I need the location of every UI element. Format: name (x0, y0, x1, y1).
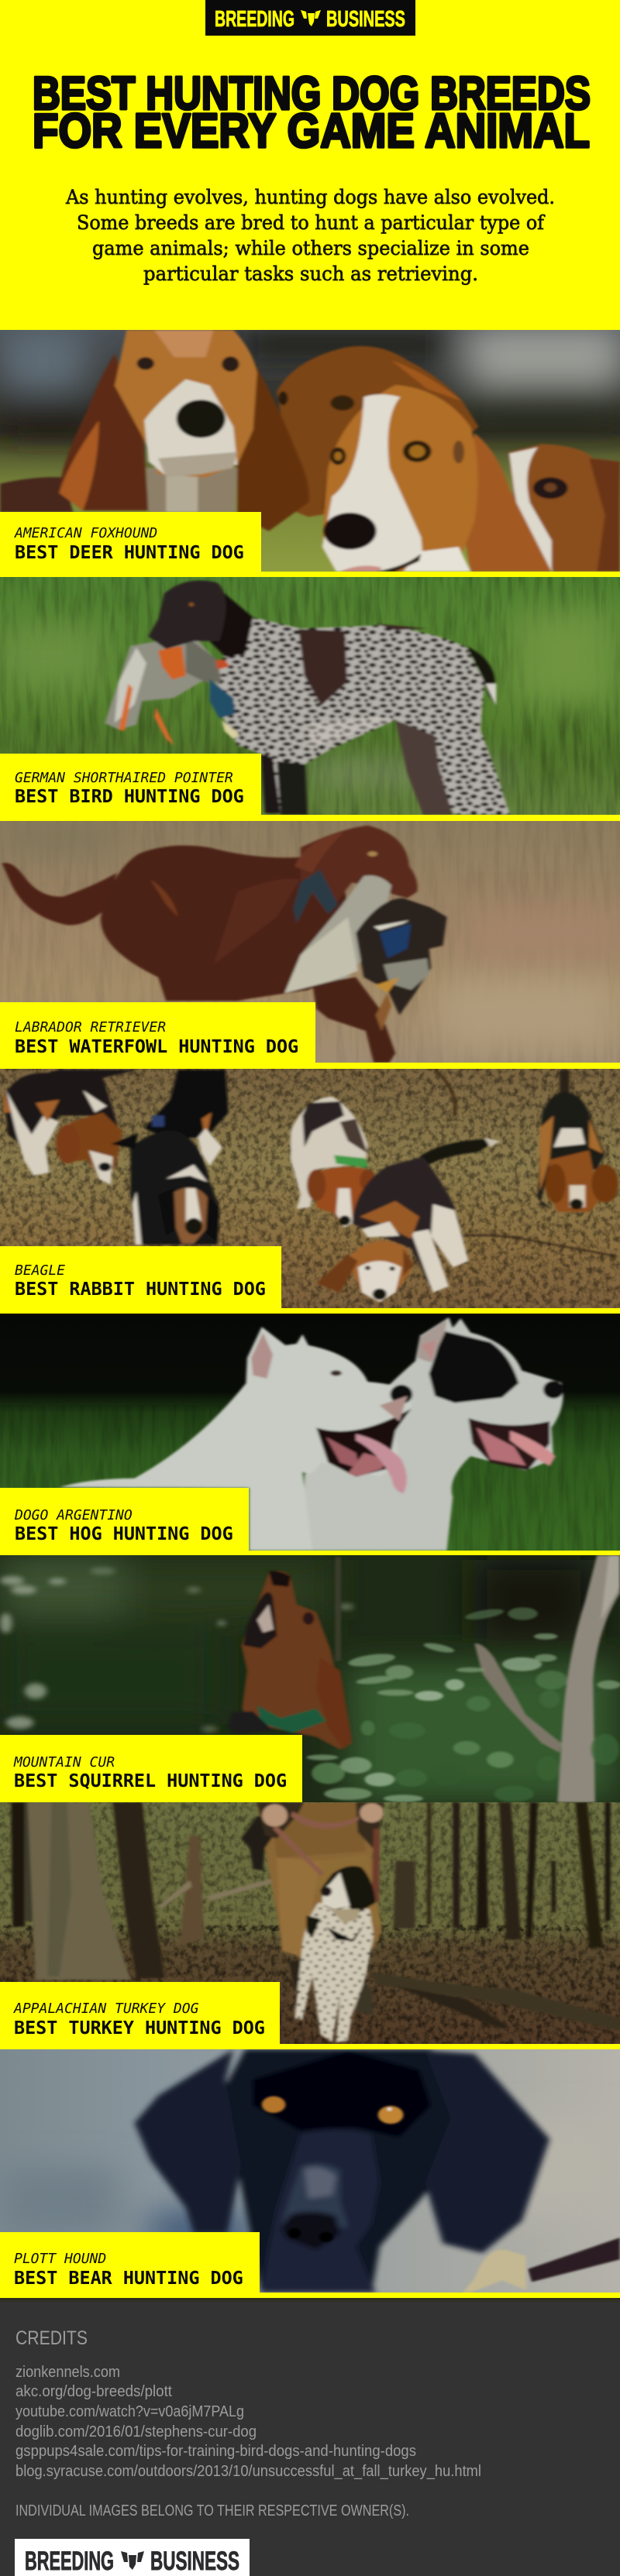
label: German Shorthaired Pointer (0, 754, 261, 821)
label: German Shorthaired Pointer: BEST BIRD HUNTING DOG (15, 785, 244, 807)
collar and leash (528, 2238, 620, 2282)
tree trunks (11, 1802, 25, 1927)
dog (294, 1903, 374, 2042)
panel: Dogo Argentino photo (0, 1314, 620, 1551)
duck (284, 875, 391, 993)
collar (294, 870, 338, 923)
dog 1 ears (60, 354, 149, 510)
label: Dogo Argentino: DOGO ARGENTINO (14, 1507, 133, 1523)
intro text: Some breeds are bred to hunt a particular type of (77, 211, 546, 234)
duck (105, 635, 219, 730)
intro text: As hunting evolves, hunting dogs have also evolved. (65, 186, 555, 208)
dog F (560, 1070, 570, 1094)
credits list: zionkennels.com (16, 2364, 120, 2381)
top logo: BREEDING (215, 7, 294, 32)
dog D (291, 1097, 367, 1209)
label: Dogo Argentino (0, 1488, 249, 1555)
tail (2, 863, 117, 926)
panel: German Shorthaired Pointer photo (0, 577, 620, 815)
label: Labrador Retriever (0, 1002, 315, 1069)
dog 4 right (508, 444, 620, 572)
man (257, 1802, 384, 1960)
dog B (144, 1070, 229, 1138)
top logo: BUSINESS (326, 7, 405, 32)
label: American Foxhound: AMERICAN FOXHOUND (14, 525, 157, 541)
body (101, 846, 356, 1001)
credits list: youtube.com/watch?v=v0a6jM7PALg (16, 2403, 244, 2420)
panel: American Foxhound photo (0, 330, 620, 572)
icon: dog face (121, 2551, 144, 2570)
dog 3 ears + face (463, 433, 552, 572)
label: Mountain Cur: MOUNTAIN CUR (13, 1754, 115, 1771)
head and ear (209, 587, 253, 657)
body (214, 617, 510, 815)
front leg (312, 977, 395, 1063)
label: Mountain Cur: BEST SQUIRREL HUNTING DOG (14, 1770, 287, 1791)
branch (435, 1235, 617, 1256)
credits heading: CREDITS (16, 2327, 88, 2349)
panel: Beagle photo (0, 1069, 620, 1308)
dog head (226, 2049, 451, 2293)
bottom logo: BREEDING (25, 2547, 114, 2576)
top logo (205, 0, 415, 36)
label: Beagle (0, 1246, 281, 1314)
intro text: game animals; while others specialize in some (92, 237, 529, 259)
saddle (298, 629, 347, 706)
leaves (306, 1607, 620, 1802)
label: Plott Hound: BEST BEAR HUNTING DOG (14, 2267, 243, 2289)
dog 2 behind (277, 346, 478, 517)
tail (467, 646, 496, 706)
credits list: gsppups4sale.com/tips-for-training-bird-dogs-and-hunting-dogs (16, 2443, 416, 2460)
label: Appalachian Turkey Dog: APPALACHIAN TURKEY DOG (13, 2001, 199, 2017)
dog C (130, 1131, 219, 1245)
panel: Appalachian Turkey Dog photo (0, 1802, 620, 2044)
dog A (4, 1070, 139, 1176)
image ownership note: INDIVIDUAL IMAGES BELONG TO THEIR RESPECTIVE OWNER(S). (16, 2502, 409, 2519)
label: Labrador Retriever: LABRADOR RETRIEVER (15, 1019, 166, 1036)
credits list: doglib.com/2016/01/stephens-cur-dog (16, 2423, 257, 2440)
dog E (419, 1139, 491, 1165)
dog 1 chest (146, 468, 237, 512)
dog 2 (305, 1317, 563, 1551)
label: German Shorthaired Pointer: GERMAN SHORTHAIRED POINTER (15, 770, 233, 786)
log (370, 1972, 620, 2031)
intro text: particular tasks such as retrieving. (143, 263, 478, 285)
label: Dogo Argentino: BEST HOG HUNTING DOG (15, 1523, 233, 1544)
bottom logo (15, 2539, 250, 2576)
credits list: akc.org/dog-breeds/plott (16, 2383, 172, 2400)
label: Labrador Retriever: BEST WATERFOWL HUNTING DOG (15, 1036, 298, 1057)
dog 1 (60, 1327, 412, 1551)
title (33, 67, 591, 158)
bottom logo: BUSINESS (150, 2547, 239, 2576)
icon: dog face (301, 10, 321, 26)
label: Appalachian Turkey Dog (0, 1982, 280, 2049)
trunk (474, 1643, 561, 1753)
credits list (16, 2364, 481, 2480)
far legs (261, 751, 284, 813)
panel: Mountain Cur photo (0, 1555, 620, 1802)
panel: Labrador Retriever photo (0, 821, 620, 1063)
label: American Foxhound (0, 512, 261, 577)
dog (241, 1571, 352, 1750)
label: Plott Hound (0, 2232, 260, 2298)
label: Beagle: BEAGLE (15, 1262, 65, 1279)
far left body (0, 477, 73, 512)
label: Mountain Cur (0, 1735, 302, 1802)
label: Plott Hound: PLOTT HOUND (14, 2251, 106, 2267)
intro text (65, 186, 555, 285)
credits list: blog.syracuse.com/outdoors/2013/10/unsuccessful_at_fall_turkey_hu.html (16, 2463, 481, 2480)
label: Beagle: BEST RABBIT HUNTING DOG (15, 1278, 266, 1300)
label: American Foxhound: BEST DEER HUNTING DOG (15, 541, 244, 563)
panel: credits (0, 2298, 620, 2576)
head (301, 826, 418, 914)
dog 1 face (115, 330, 257, 477)
panel: Plott Hound photo (0, 2049, 620, 2293)
label: Appalachian Turkey Dog: BEST TURKEY HUNTING DOG (14, 2017, 265, 2038)
